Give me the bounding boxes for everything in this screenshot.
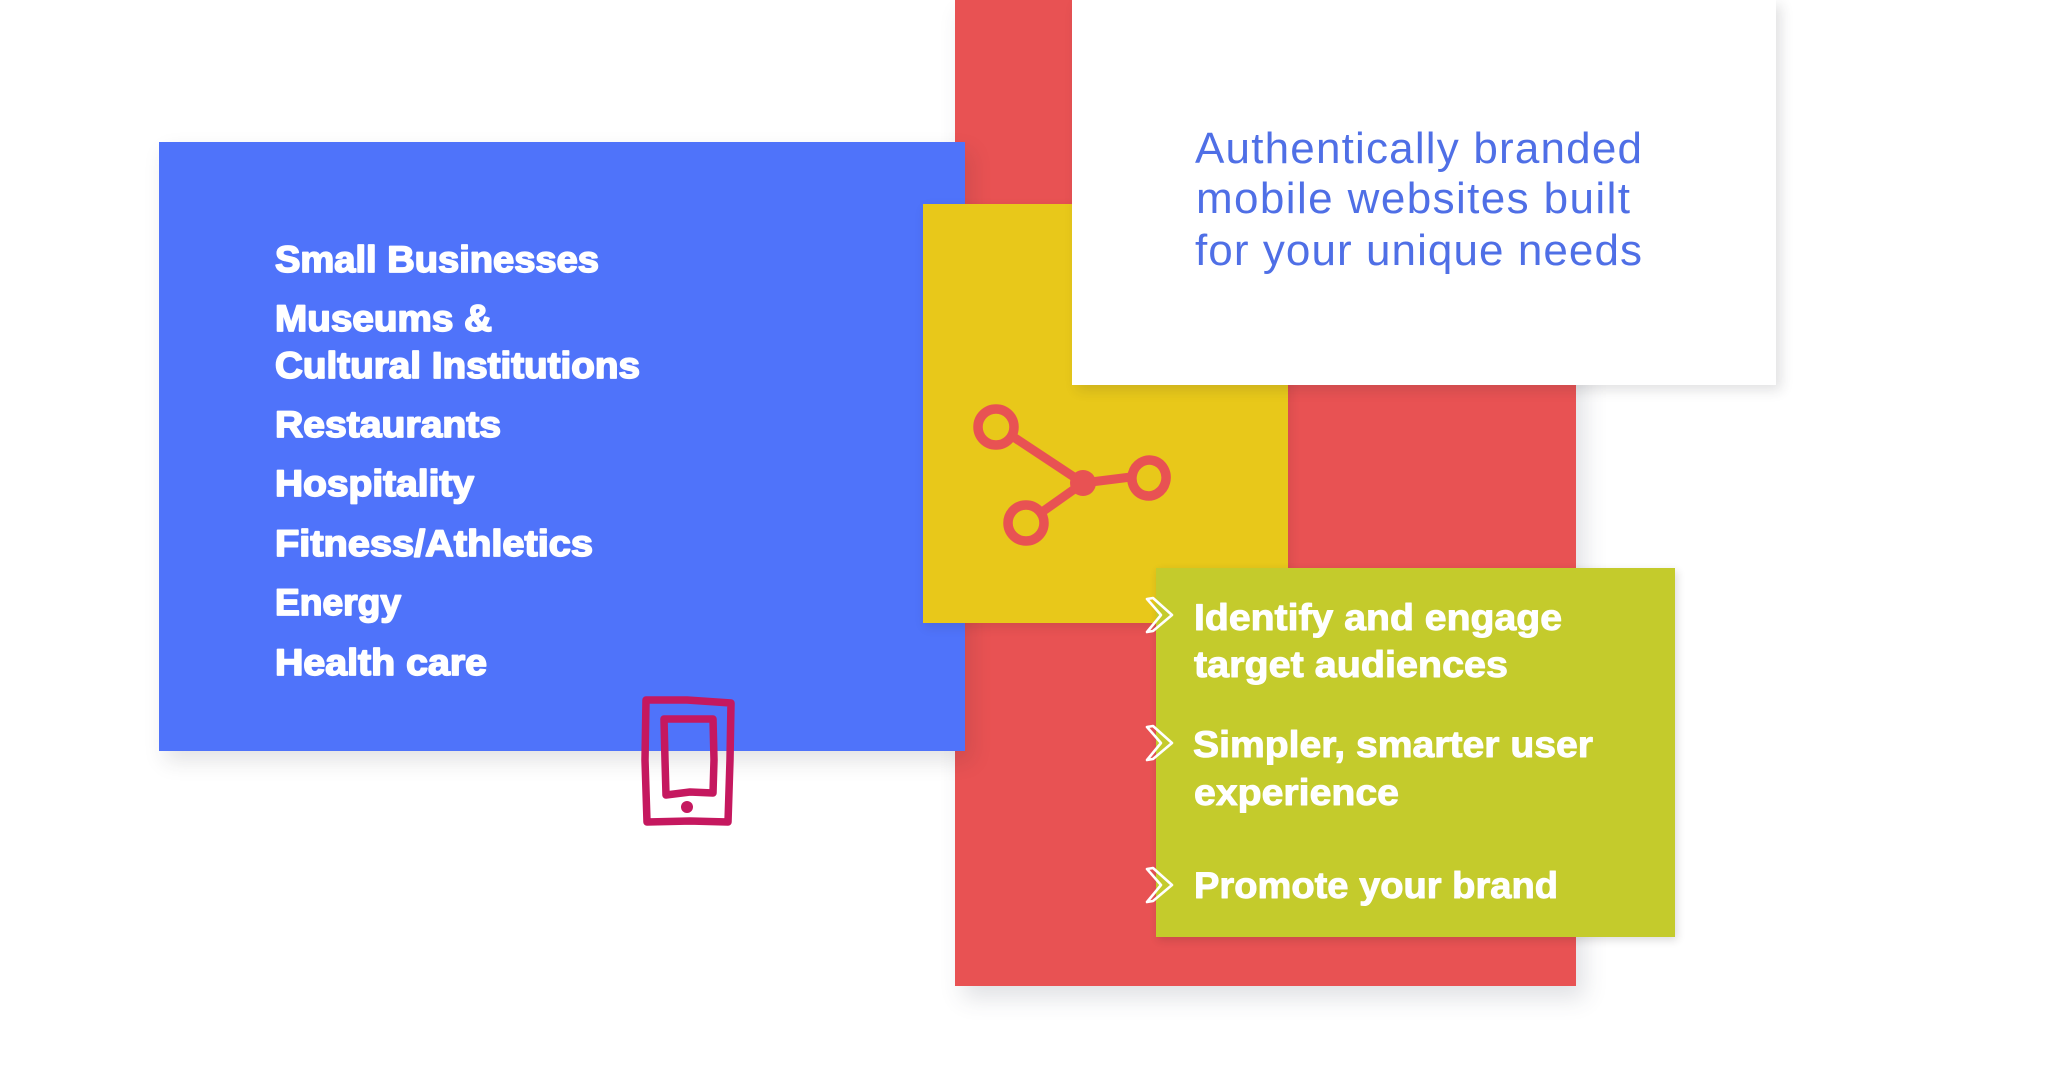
benefit: Simpler, smarter user experience: experience: [1194, 772, 1399, 813]
benefit: Identify and engage target audiences: Identify and engage: [1194, 597, 1562, 638]
list item: Energy: Energy: [275, 582, 401, 623]
benefit: Identify and engage target audiences: target audiences: [1194, 644, 1508, 685]
icon: share nodes: [978, 409, 1170, 541]
icon: chevron 3: [1146, 866, 1174, 904]
icon: chevron 2: [1146, 724, 1174, 762]
panel: red backdrop: [955, 0, 1576, 986]
benefit: Promote your brand: Promote your brand: [1194, 865, 1558, 906]
panel: yellow share block: [923, 204, 1288, 623]
list item: Small Businesses: Small Businesses: [275, 239, 599, 280]
headline text: mobile websites built: [1196, 174, 1630, 223]
list item: Fitness/Athletics: Fitness/Athletics: [275, 523, 593, 564]
list item: Health care: Health care: [275, 642, 487, 683]
list item: Hospitality: Hospitality: [275, 463, 474, 504]
list item: Museums & Cultural Institutions: Museums &: [275, 298, 492, 339]
list item: Museums & Cultural Institutions: [275, 298, 640, 386]
icon: hand-drawn phone: [641, 696, 735, 826]
benefit: Identify and engage target audiences: [1194, 597, 1562, 685]
benefit: Simpler, smarter user experience: [1193, 724, 1593, 813]
panel: green benefits: [1156, 568, 1675, 937]
panel: audience list: [159, 142, 965, 751]
list item: Museums & Cultural Institutions: Cultural Institutions: [275, 345, 640, 386]
icon: chevron 1: [1146, 596, 1174, 634]
headline text: Authentically branded: [1195, 124, 1642, 173]
headline text: for your unique needs: [1195, 226, 1642, 275]
benefit: Simpler, smarter user experience: Simpler, smarter user: [1193, 724, 1593, 765]
panel: white headline card: [1072, 0, 1776, 385]
list item: Restaurants: Restaurants: [275, 404, 501, 445]
headline text: [1195, 124, 1642, 275]
